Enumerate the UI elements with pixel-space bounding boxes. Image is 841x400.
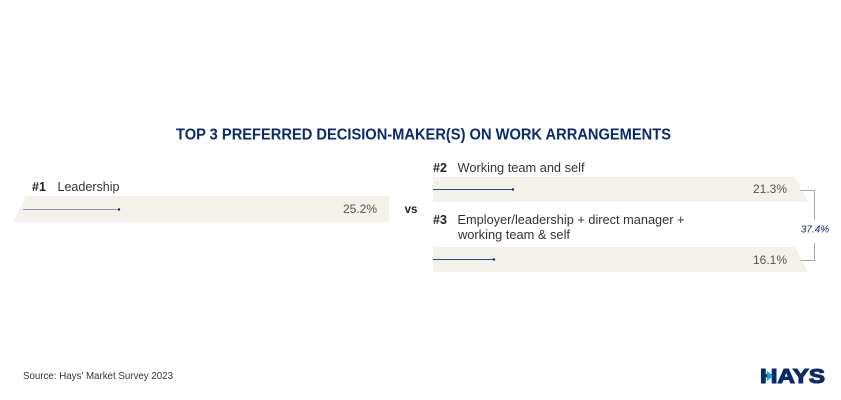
- label: rank 3: working team & self: [457, 228, 571, 242]
- label: rank 2: Working team and self: [458, 161, 585, 175]
- vs label: vs: [405, 204, 417, 216]
- value: rank 2: 21.3%: [753, 182, 787, 196]
- value: rank 3: 16.1%: [753, 253, 787, 267]
- label: rank 2: #2: [433, 161, 447, 175]
- label: rank 3: #3: [433, 213, 447, 227]
- value: rank 1: 25.2%: [343, 202, 377, 216]
- bar: rank 1: [13, 196, 389, 222]
- logo: Hays: HAYS: [760, 366, 825, 388]
- bar: rank 2: [433, 177, 808, 202]
- label: rank 1: #1: [32, 180, 46, 194]
- bar: rank 3: [433, 247, 808, 272]
- panel: rank 2 working team and self: [433, 161, 808, 202]
- arrow: rank 3 value line: [433, 258, 495, 261]
- arrow: rank 1 value line: [23, 208, 120, 211]
- title: TOP 3 PREFERRED DECISION-MAKER(S) ON WORK ARRANGEMENTS: [176, 126, 671, 144]
- label: rank 1: Leadership: [58, 180, 120, 194]
- label: rank 3: Employer/leadership + direct manager +: [458, 213, 684, 227]
- bracket connecting rank 2 and rank 3: [800, 190, 814, 260]
- panel: rank 1 leadership: [13, 180, 389, 222]
- panel: rank 3 combination: [433, 213, 808, 272]
- source note: Source: Hays' Market Survey 2023: [23, 370, 173, 382]
- arrow: rank 2 value line: [433, 188, 514, 191]
- label: rank 3: [433, 213, 684, 242]
- combined value: 37.4%: [801, 224, 829, 236]
